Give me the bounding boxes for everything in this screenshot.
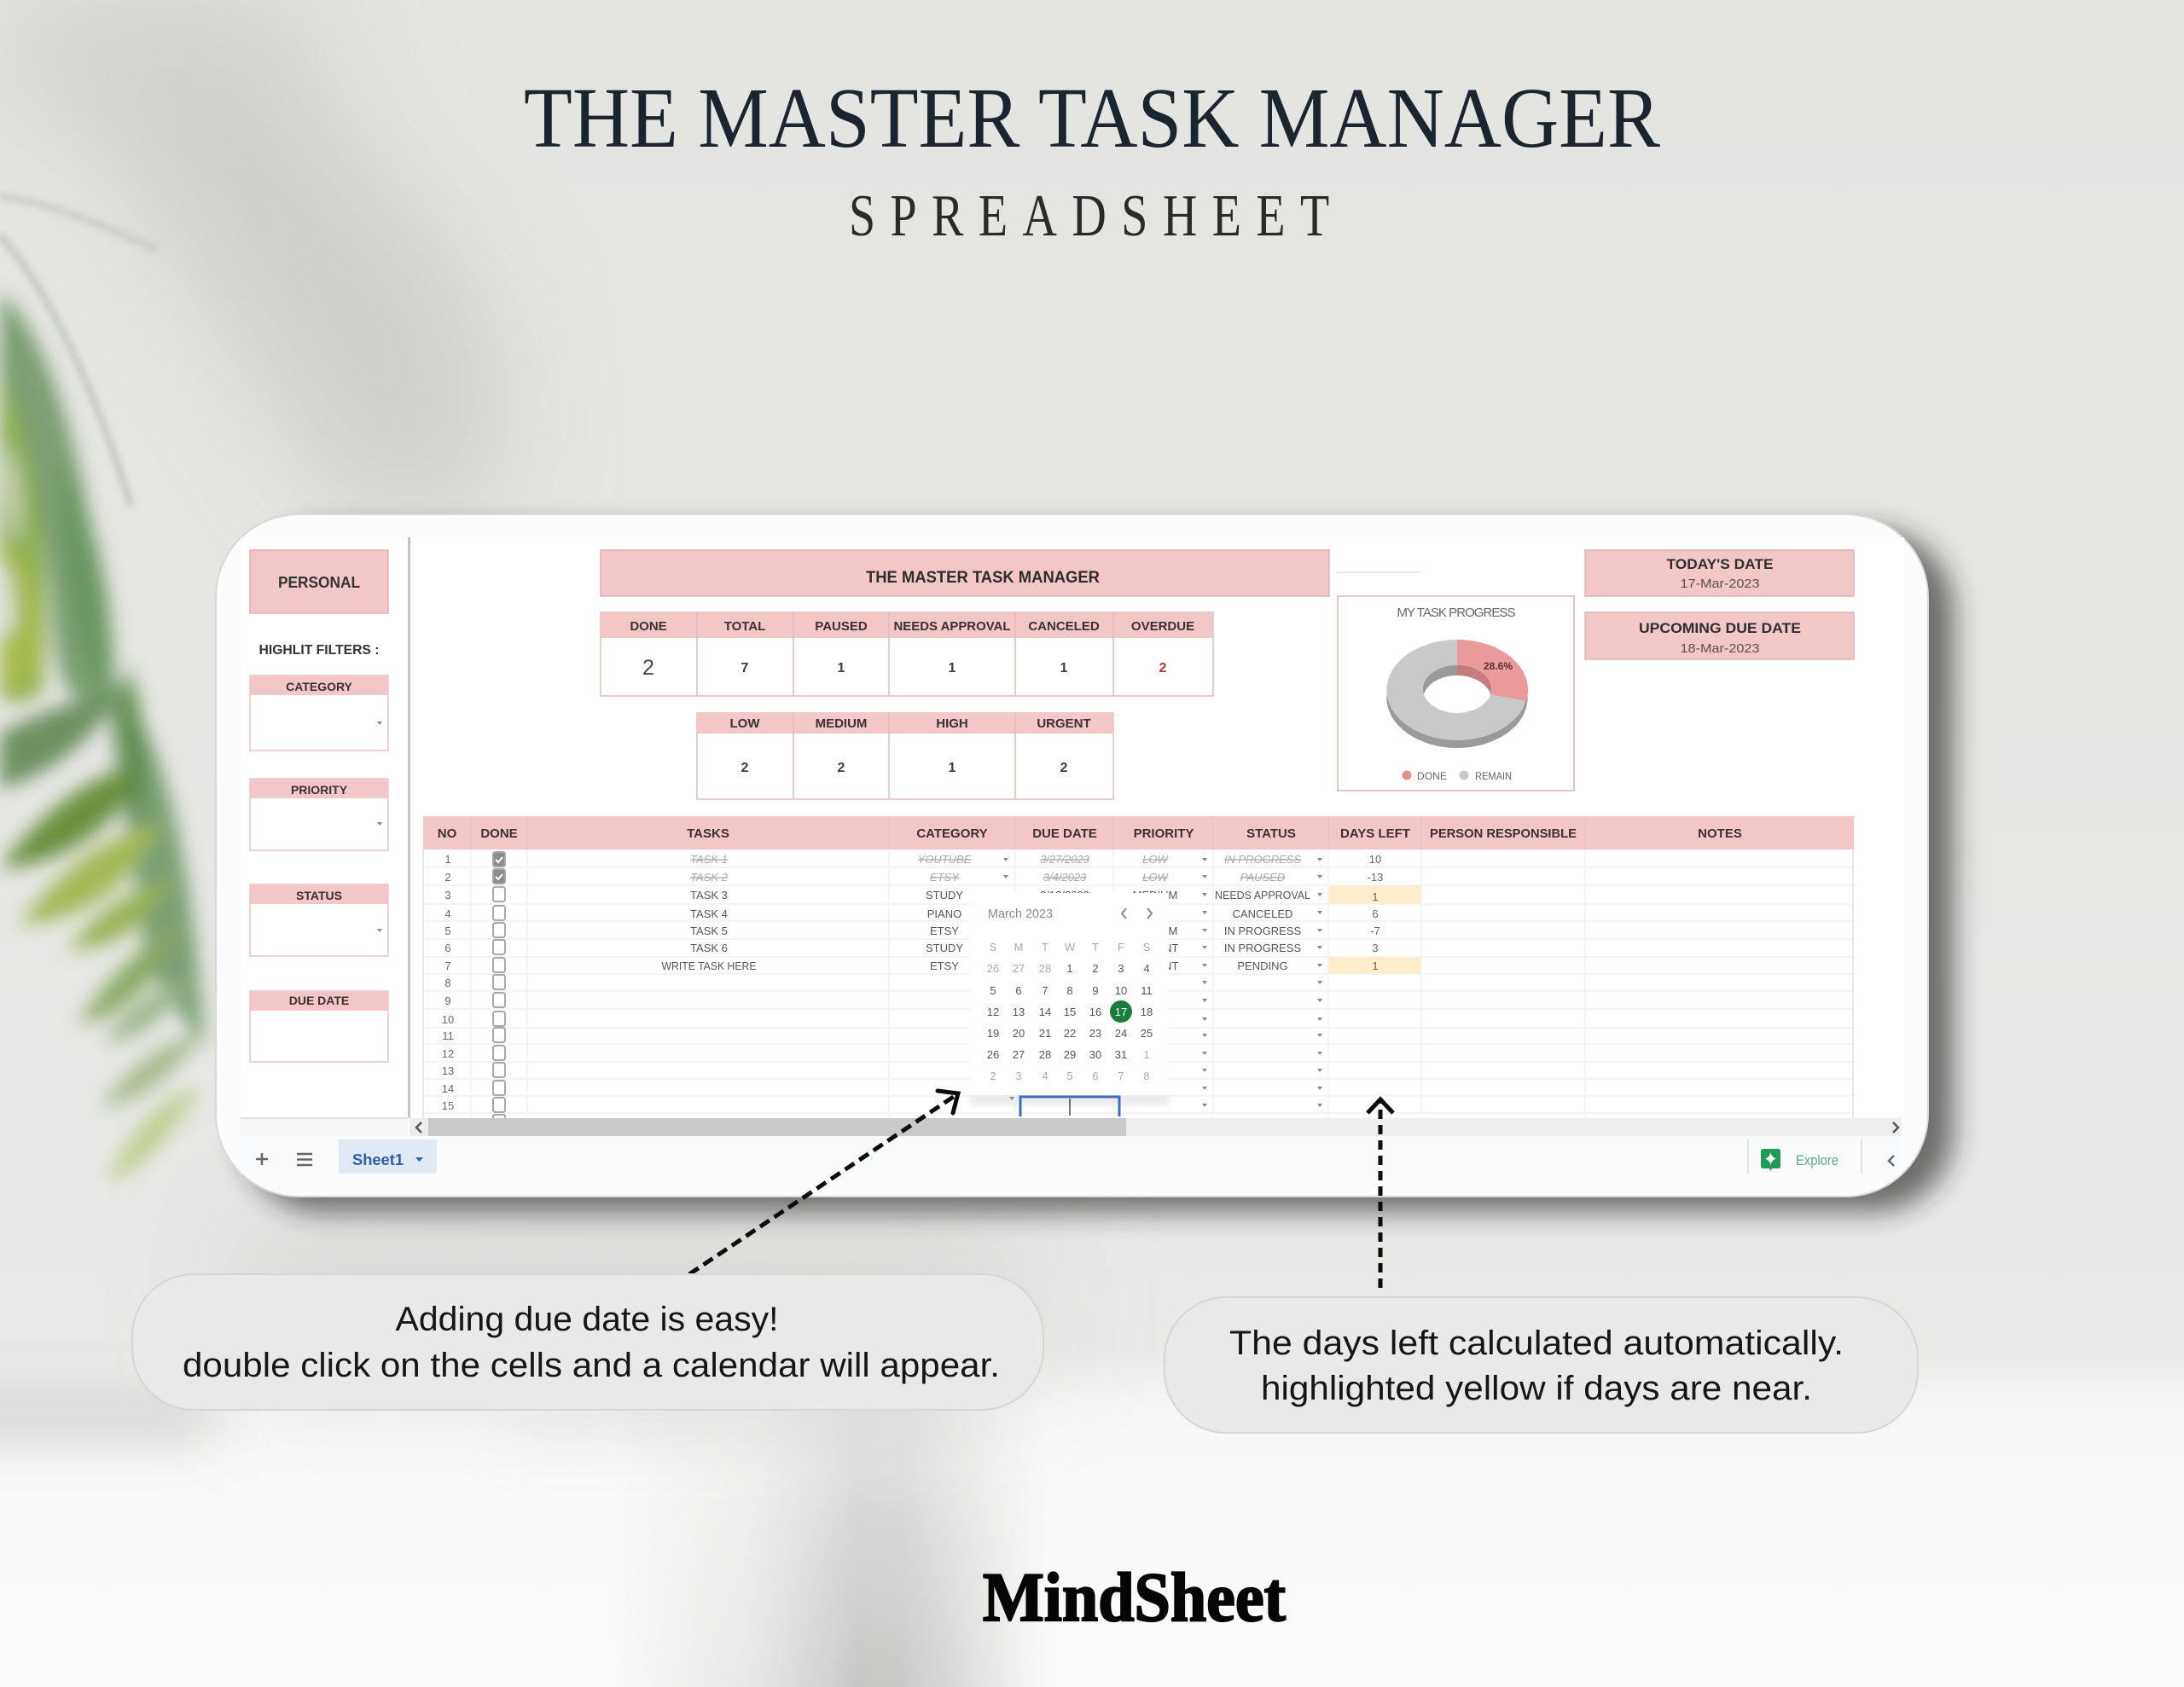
status cells: PENDING <box>1237 959 1288 972</box>
sheet name box <box>250 550 388 613</box>
month navigation chevrons <box>1122 908 1152 919</box>
calendar days: 29 <box>1064 1048 1076 1061</box>
panel: status counters: 2 <box>1159 661 1167 675</box>
calendar days: 28 <box>1039 1048 1051 1061</box>
panel: status counters: 1 <box>1060 661 1068 675</box>
arrow: to days left column <box>1368 1099 1393 1288</box>
weekday labels: F <box>1118 941 1124 954</box>
days left cells: -7 <box>1370 925 1380 937</box>
days left cells: 6 <box>1372 907 1379 920</box>
panel: status counters: NEEDS APPROVAL <box>894 619 1010 634</box>
priority cells: MEDIUM <box>1133 925 1177 937</box>
table header: TASKS <box>687 826 729 841</box>
priority cells: MEDIUM <box>1133 889 1177 901</box>
category cells: PIANO <box>927 907 961 920</box>
panel: bottom sheet tabs bar <box>241 1136 1902 1174</box>
weekday labels <box>990 941 1151 954</box>
checkboxes <box>493 852 505 1118</box>
row numbers: 8 <box>444 977 451 989</box>
add sheet icon <box>256 1153 268 1165</box>
calendar days: 20 <box>1013 1027 1025 1040</box>
calendar days: 12 <box>987 1006 999 1018</box>
calendar days: 31 <box>1115 1048 1127 1061</box>
status cells: IN PROGRESS <box>1224 925 1301 937</box>
panel: status counters: 1 <box>949 661 956 675</box>
calendar days: 14 <box>1039 1006 1051 1018</box>
weekday labels: S <box>1143 941 1151 954</box>
panel: left filter sidebar <box>250 550 388 1062</box>
status cells: CANCELED <box>1233 907 1292 920</box>
status cells: IN PROGRESS <box>1224 942 1301 954</box>
calendar days: 18 <box>1141 1006 1153 1018</box>
explore button: Explore <box>1796 1152 1838 1168</box>
calendar days: 1 <box>1066 962 1073 975</box>
category cells: ETSY <box>930 925 959 937</box>
chart title: MY TASK PROGRESS <box>1397 606 1515 620</box>
side panel chevron <box>1889 1156 1894 1166</box>
panel: status counters: 7 <box>741 661 749 675</box>
weekday labels: T <box>1042 941 1048 954</box>
month heading: March 2023 <box>988 907 1053 921</box>
weekday labels: S <box>990 941 997 954</box>
panel: date picker calendar <box>970 893 1169 1116</box>
panel: status counters: 1 <box>838 661 845 675</box>
callout: calendar tip: Adding due date is easy! <box>396 1301 778 1338</box>
calendar days: 27 <box>1013 962 1025 975</box>
arrow: to calendar <box>689 1091 958 1274</box>
callout: days left tip <box>1165 1297 1918 1433</box>
days left cells: 1 <box>1372 890 1379 903</box>
due date filter <box>250 991 388 1062</box>
days left cells: 10 <box>1369 853 1381 866</box>
due date cells: 3/4/2023 <box>1043 871 1087 884</box>
calendar days: 11 <box>1141 984 1153 997</box>
calendar days: 21 <box>1039 1027 1051 1040</box>
callout: days left tip: The days left calculated automatically. <box>1229 1325 1844 1362</box>
due date filter: DUE DATE <box>289 994 349 1007</box>
status cells: IN PROGRESS <box>1224 853 1301 866</box>
calendar days: 16 <box>1089 1006 1101 1018</box>
row numbers: 4 <box>444 907 451 920</box>
priority cells: HIGH <box>1141 907 1169 920</box>
due date cells: 3/20/2023 <box>1040 942 1089 954</box>
sheet tab <box>339 1139 437 1174</box>
upcoming due date box: 18-Mar-2023 <box>1681 641 1759 656</box>
row numbers: 12 <box>442 1047 454 1060</box>
calendar days: 22 <box>1064 1027 1076 1040</box>
panel: priority counters: 2 <box>838 761 845 775</box>
panel: status counters: TOTAL <box>724 619 765 634</box>
calendar days: 26 <box>987 1048 999 1061</box>
upcoming due date box: UPCOMING DUE DATE <box>1639 620 1801 636</box>
task names <box>662 853 757 972</box>
3D donut <box>1386 640 1528 748</box>
calendar days: 27 <box>1013 1048 1025 1061</box>
calendar days: 8 <box>1143 1070 1150 1082</box>
calendar days: 7 <box>1118 1070 1124 1082</box>
priority cells <box>1132 853 1179 972</box>
status filter: STATUS <box>296 889 342 902</box>
table header: CATEGORY <box>916 826 988 841</box>
row numbers <box>442 853 454 1112</box>
today's date box: 17-Mar-2023 <box>1681 577 1759 591</box>
calendar days: 1 <box>1143 1048 1150 1061</box>
panel: status counters: DONE <box>630 619 667 634</box>
legend: REMAIN <box>1475 770 1512 782</box>
category cells: ETSY <box>930 871 960 884</box>
panel: status counters <box>601 612 1213 696</box>
weekday labels: M <box>1014 941 1023 954</box>
table header: PRIORITY <box>1134 826 1194 841</box>
calendar days: 3 <box>1015 1070 1022 1082</box>
dropdown arrows <box>1003 858 1322 1107</box>
weekday labels: T <box>1092 941 1099 954</box>
task names: TASK 3 <box>690 889 728 901</box>
calendar days: 19 <box>987 1027 999 1040</box>
calendar days: 3 <box>1118 962 1124 975</box>
table header: DAYS LEFT <box>1340 826 1410 841</box>
row numbers: 9 <box>444 994 451 1007</box>
task names: TASK 4 <box>690 907 728 920</box>
table header: PERSON RESPONSIBLE <box>1430 826 1577 841</box>
priority cells: LOW <box>1142 871 1170 884</box>
panel: priority counters: URGENT <box>1037 716 1091 731</box>
task names: TASK 1 <box>690 853 728 866</box>
panel: status counters: 2 <box>642 656 654 680</box>
status cells: NEEDS APPROVAL <box>1215 889 1310 901</box>
days left cells: 1 <box>1372 959 1379 972</box>
due date cells: 3/10/2023 <box>1040 925 1089 937</box>
calendar days: 30 <box>1089 1048 1101 1061</box>
days left cells <box>1368 853 1383 972</box>
panel: donut chart <box>1338 596 1574 791</box>
panel: priority counters: MEDIUM <box>816 716 867 731</box>
days left cells: -13 <box>1368 871 1383 884</box>
status filter <box>250 884 388 956</box>
callout: calendar tip <box>132 1274 1043 1410</box>
panel: task table <box>423 816 1854 1118</box>
due date cells: 3/18/2023 <box>1040 889 1089 901</box>
category cells: YOUTUBE <box>918 853 972 866</box>
calendar days: 7 <box>1042 984 1048 997</box>
table header <box>423 816 1854 849</box>
panel: priority counters: LOW <box>730 716 760 731</box>
row numbers: 1 <box>444 853 451 866</box>
due date cells <box>1040 853 1090 972</box>
panel: status counters: OVERDUE <box>1131 619 1194 634</box>
table header: DUE DATE <box>1032 826 1097 841</box>
legend <box>1403 770 1512 782</box>
category filter <box>250 675 388 751</box>
category cells <box>918 853 972 972</box>
all sheets menu icon <box>297 1154 312 1165</box>
panel: priority counters: 2 <box>741 761 749 775</box>
explore button <box>1761 1149 1838 1171</box>
title: THE MASTER TASK MANAGER <box>524 70 1661 165</box>
calendar days: 8 <box>1066 984 1073 997</box>
task names: TASK 2 <box>690 871 729 884</box>
task names: TASK 5 <box>690 925 728 937</box>
category cells: STUDY <box>926 889 963 901</box>
panel: spreadsheet screenshot card <box>216 514 1928 1197</box>
calendar days: 5 <box>990 984 996 997</box>
calendar days: 6 <box>1092 1070 1099 1082</box>
table header: NO <box>438 826 457 841</box>
card shadow <box>241 530 1954 1212</box>
sheet title bar: THE MASTER TASK MANAGER <box>866 569 1100 587</box>
calendar days: 2 <box>990 1070 996 1082</box>
calendar days <box>987 962 1153 1082</box>
row numbers: 11 <box>442 1029 454 1042</box>
sheet name box: PERSONAL <box>278 574 360 591</box>
panel: priority counters: 1 <box>949 761 956 775</box>
decorative blurred palm plant <box>0 196 205 1180</box>
callout: calendar tip: double click on the cells and a calendar will appear. <box>183 1347 1000 1384</box>
today's date box <box>1585 550 1854 596</box>
calendar days: 15 <box>1064 1006 1076 1018</box>
today's date box: TODAY'S DATE <box>1667 556 1773 572</box>
panel: scrollbar <box>241 1118 1902 1136</box>
task names: WRITE TASK HERE <box>662 959 757 972</box>
subtitle: SPREADSHEET <box>849 183 1329 248</box>
due date cells: 3/27/2023 <box>1040 853 1090 866</box>
table header: DONE <box>480 826 518 841</box>
row numbers: 10 <box>442 1013 454 1026</box>
calendar days: 9 <box>1092 984 1099 997</box>
table header: STATUS <box>1246 826 1296 841</box>
upcoming due date box <box>1585 612 1854 659</box>
panel: priority counters <box>697 713 1113 799</box>
priority cells: URGENT <box>1132 942 1179 954</box>
category cells: ETSY <box>930 959 959 972</box>
row numbers: 5 <box>444 925 451 937</box>
calendar days: 26 <box>987 962 999 975</box>
calendar days: 28 <box>1039 962 1051 975</box>
due date cells: 3/23/2023 <box>1040 907 1089 920</box>
calendar days: 2 <box>1092 962 1099 975</box>
row numbers: 13 <box>442 1064 454 1077</box>
logo: MindSheet: MindSheet <box>983 1558 1286 1636</box>
priority cells: URGENT <box>1132 959 1179 972</box>
calendar days: 4 <box>1042 1070 1048 1082</box>
priority filter: PRIORITY <box>291 783 348 797</box>
calendar days: 13 <box>1013 1006 1025 1018</box>
days left cells: 3 <box>1372 942 1379 954</box>
calendar days: 6 <box>1015 984 1022 997</box>
calendar days: 10 <box>1115 984 1127 997</box>
category filter: CATEGORY <box>286 680 353 693</box>
panel: status counters: PAUSED <box>815 619 868 634</box>
priority filter <box>250 779 388 850</box>
panel: status counters: CANCELED <box>1028 619 1100 634</box>
legend: DONE <box>1417 770 1447 782</box>
table header: NOTES <box>1698 826 1742 841</box>
priority cells: LOW <box>1142 853 1170 866</box>
sheet title bar <box>601 550 1329 596</box>
selected cell <box>1020 1097 1119 1116</box>
filters heading: HIGHLIT FILTERS : <box>259 643 379 658</box>
calendar days: 4 <box>1143 962 1150 975</box>
row numbers: 7 <box>444 959 451 972</box>
category cells: STUDY <box>926 942 963 954</box>
calendar days: 23 <box>1089 1027 1101 1040</box>
panel: priority counters: HIGH <box>936 716 968 731</box>
calendar days: 5 <box>1066 1070 1073 1082</box>
status cells <box>1215 853 1310 972</box>
task names: TASK 6 <box>690 942 728 954</box>
row numbers: 6 <box>444 942 451 954</box>
row numbers: 2 <box>444 871 451 884</box>
calendar days: 17 <box>1115 1006 1127 1018</box>
percentage label: 28.6% <box>1484 660 1513 672</box>
calendar days: 25 <box>1141 1027 1153 1040</box>
calendar days: 24 <box>1115 1027 1127 1040</box>
sheet tab: Sheet1 <box>352 1151 404 1168</box>
status cells: PAUSED <box>1240 871 1285 884</box>
row numbers: 15 <box>442 1099 454 1112</box>
callout: days left tip: highlighted yellow if days are near. <box>1261 1370 1812 1407</box>
panel: priority counters: 2 <box>1060 761 1068 775</box>
weekday labels: W <box>1065 941 1076 954</box>
row numbers: 3 <box>444 889 451 901</box>
due date cells: 3/18/2023 <box>1040 959 1089 972</box>
row numbers: 14 <box>442 1082 454 1095</box>
